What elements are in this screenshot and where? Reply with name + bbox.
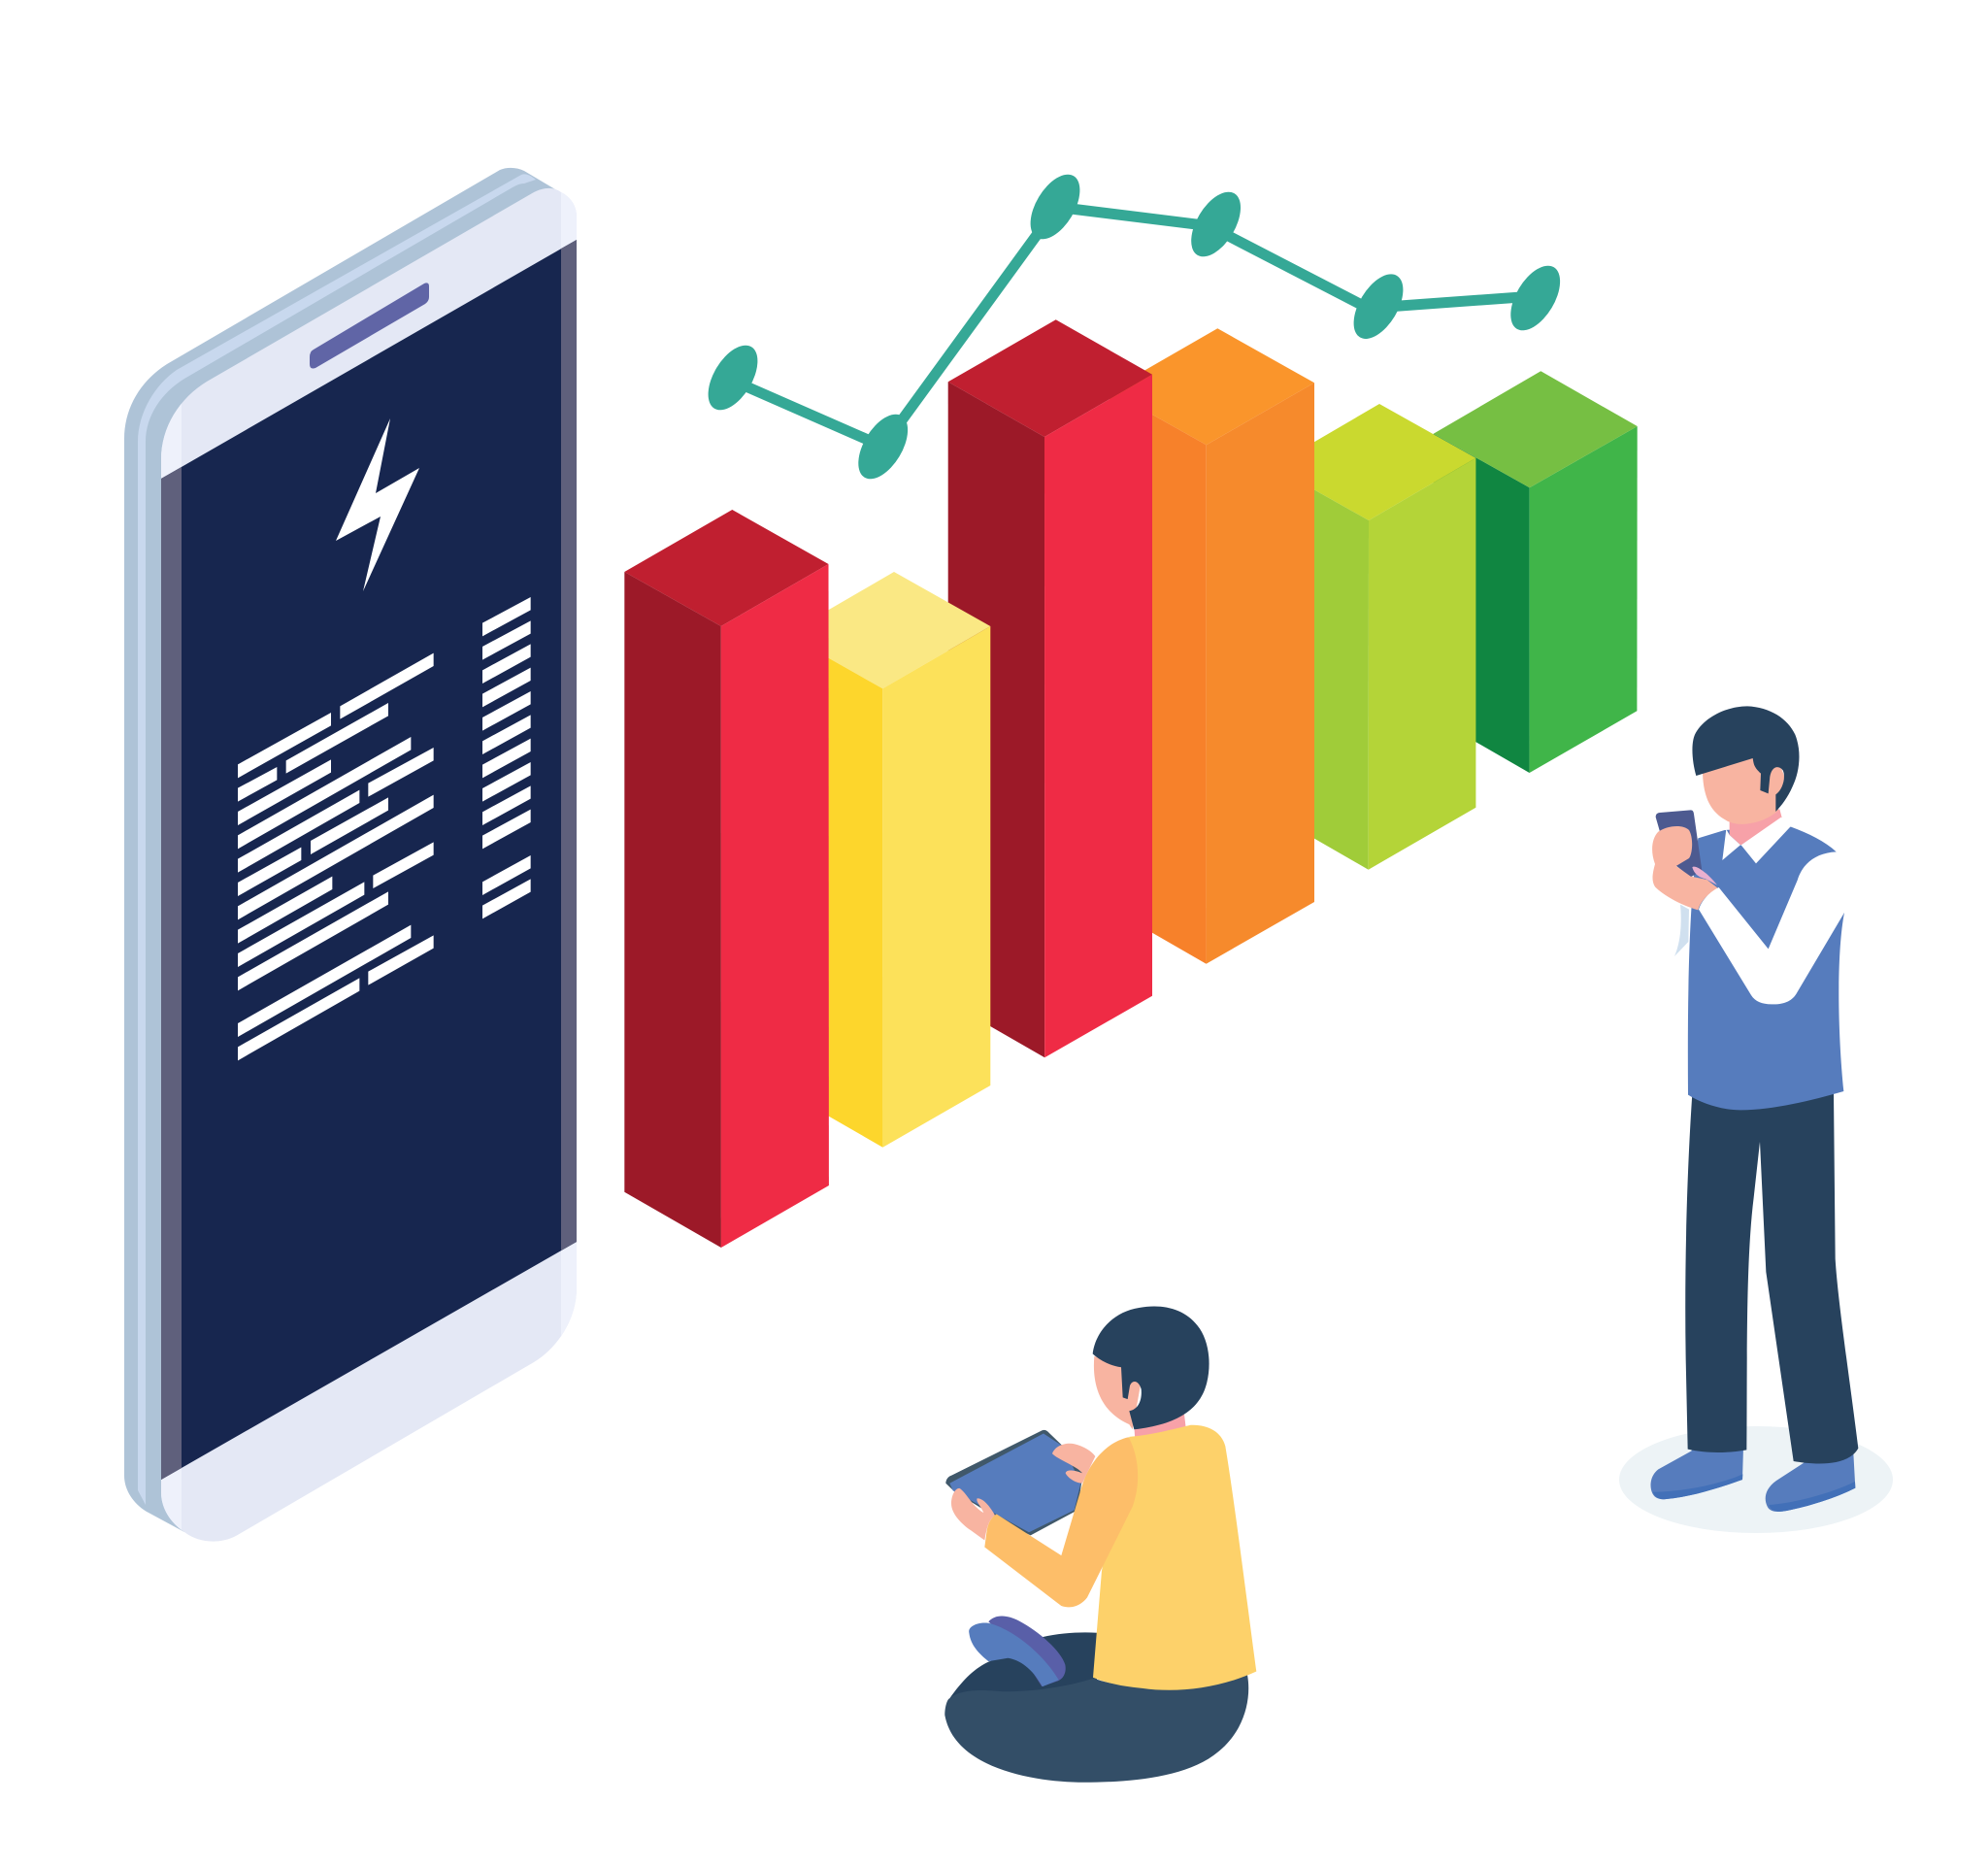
collar bbox=[1722, 817, 1790, 863]
phone: light side band bbox=[138, 174, 536, 1505]
bar: lime bbox=[1273, 404, 1475, 870]
tablet bbox=[945, 1430, 1084, 1535]
chart nodes bbox=[698, 166, 1571, 487]
phone: front bezel bbox=[161, 188, 577, 1542]
bar: tall red bbox=[948, 319, 1152, 1057]
torso, head and arms bbox=[1652, 706, 1857, 1110]
bar: green (top) bbox=[1434, 371, 1638, 487]
phone: bezel highlight strips bbox=[161, 175, 577, 1553]
bar: yellow bbox=[786, 572, 990, 1148]
hand bbox=[1652, 826, 1718, 910]
sleeve bbox=[1699, 851, 1857, 1004]
shirt tail bbox=[1674, 905, 1689, 956]
phone in hand bbox=[1656, 810, 1702, 877]
phone: speaker bbox=[310, 283, 429, 369]
text lines: side column bbox=[482, 597, 531, 918]
face bbox=[1094, 1356, 1143, 1429]
trend line bbox=[733, 207, 1535, 447]
hair bbox=[1093, 1306, 1209, 1429]
sweater bbox=[1093, 1425, 1256, 1690]
back leg bbox=[949, 1632, 1097, 1698]
ground shadow bbox=[1619, 1426, 1893, 1533]
hair bbox=[1692, 706, 1799, 812]
neck bbox=[1134, 1415, 1186, 1440]
illustration: mobile analytics scene bbox=[124, 167, 1893, 1783]
text lines: main column bbox=[238, 653, 434, 1060]
seated legs bbox=[944, 1675, 1248, 1783]
person: sitting with tablet bbox=[944, 1306, 1256, 1783]
bar: green (faces) bbox=[1434, 426, 1638, 773]
neck bbox=[1730, 809, 1782, 846]
bar: orange bbox=[1110, 328, 1314, 964]
phone: screen bbox=[161, 240, 577, 1480]
lower hand bbox=[951, 1488, 995, 1541]
sweater arm bbox=[984, 1437, 1138, 1607]
vest bbox=[1688, 827, 1844, 1110]
legs and shoes bbox=[1651, 1092, 1858, 1512]
bar: short red bbox=[624, 510, 829, 1248]
icon: lightning bolt bbox=[336, 418, 419, 591]
person: standing with phone bbox=[1619, 706, 1893, 1533]
line chart bbox=[698, 166, 1571, 487]
phone: back casing bbox=[124, 168, 577, 1532]
upper hand bbox=[1052, 1444, 1095, 1484]
face bbox=[1703, 755, 1784, 824]
phone: screen edge strips bbox=[161, 240, 577, 1480]
bar chart bbox=[624, 319, 1638, 1248]
thumb bbox=[1692, 867, 1717, 885]
phone bbox=[124, 168, 577, 1553]
shoe bbox=[969, 1617, 1066, 1686]
